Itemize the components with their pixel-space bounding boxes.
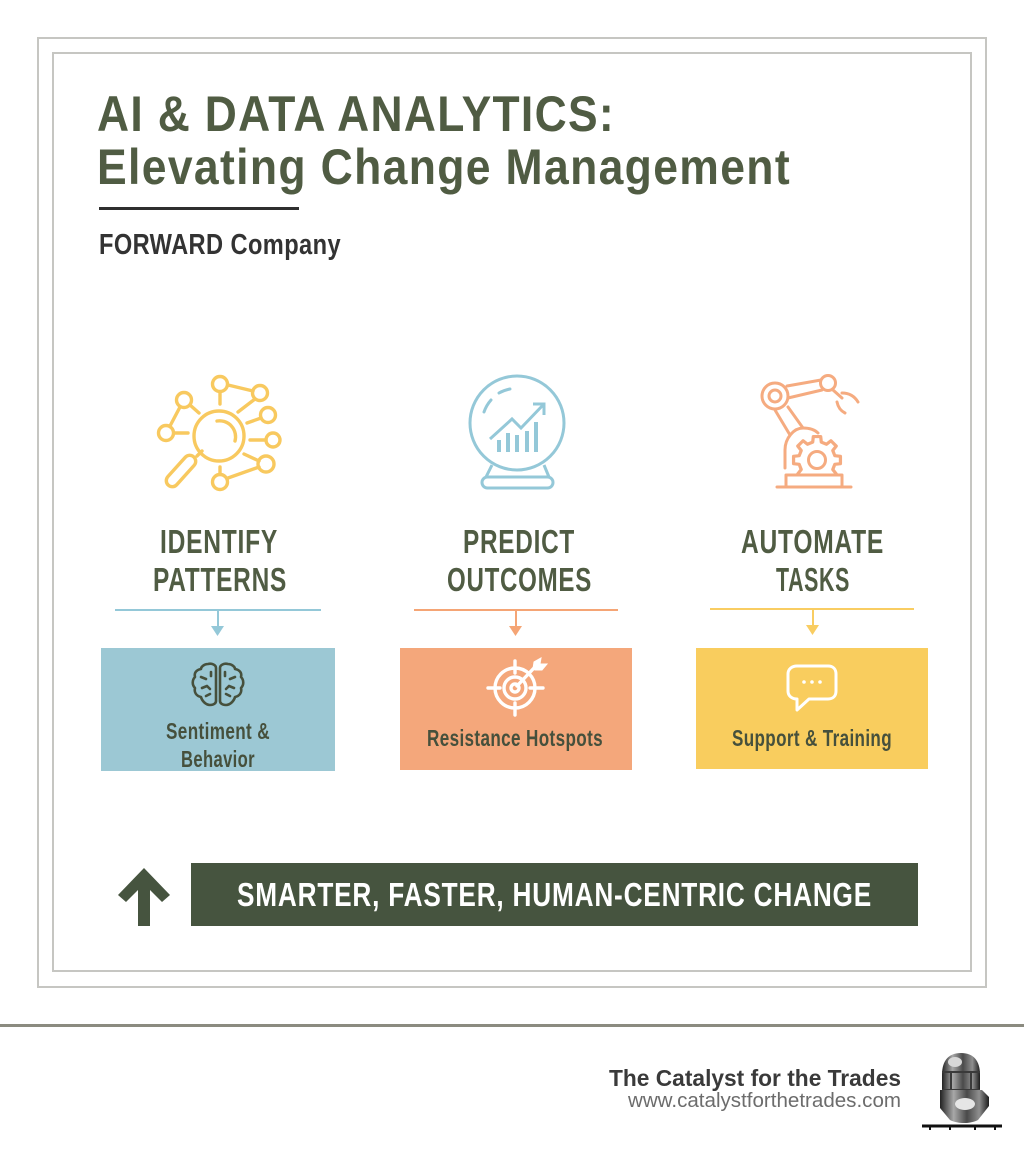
arrow: blue connector xyxy=(115,609,321,636)
column heading: identify patterns xyxy=(153,523,287,598)
column heading: predict outcomes xyxy=(447,523,592,598)
title: Elevating Change Management xyxy=(97,139,791,195)
label: sentiment and behavior: Sentiment & xyxy=(166,718,270,744)
label: resistance hotspots: Resistance Hotspots xyxy=(427,725,603,751)
icon: microphone logo xyxy=(922,1053,1002,1130)
icon: speech bubble xyxy=(788,666,836,710)
title: AI & DATA ANALYTICS: xyxy=(97,86,615,142)
footer text: www.catalystforthetrades.com xyxy=(627,1090,901,1112)
column heading: identify patterns: PATTERNS xyxy=(153,561,287,598)
label: sentiment and behavior xyxy=(166,718,270,772)
panel: resistance hotspots xyxy=(400,648,632,770)
label: sentiment and behavior: Behavior xyxy=(181,746,255,772)
icon: crystal ball xyxy=(470,376,564,488)
footer rule xyxy=(0,1024,1024,1027)
column heading: automate tasks: TASKS xyxy=(776,561,850,598)
column heading: automate tasks: AUTOMATE xyxy=(741,523,884,560)
icon: magnifier network xyxy=(158,376,280,490)
banner: SMARTER, FASTER, HUMAN-CENTRIC CHANGE xyxy=(237,876,872,913)
column heading: predict outcomes: OUTCOMES xyxy=(447,561,592,598)
icon: target with arrow xyxy=(488,658,547,715)
footer text xyxy=(609,1065,901,1112)
subtitle: FORWARD Company xyxy=(99,207,341,261)
icon: up arrow xyxy=(118,868,170,926)
title xyxy=(97,86,791,195)
panel: sentiment and behavior xyxy=(101,648,335,772)
banner xyxy=(191,863,918,926)
column heading: predict outcomes: PREDICT xyxy=(463,523,575,560)
subtitle: FORWARD Company: FORWARD Company xyxy=(99,229,341,261)
column heading: identify patterns: IDENTIFY xyxy=(160,523,278,560)
icon: robot arm xyxy=(762,376,858,487)
panel: support and training xyxy=(696,648,928,769)
arrow: yellow connector xyxy=(710,608,914,635)
icon: brain xyxy=(193,664,243,705)
footer text: The Catalyst for the Trades xyxy=(609,1065,901,1091)
arrow: orange connector xyxy=(414,609,618,636)
label: support and training: Support & Training xyxy=(732,725,892,751)
column heading: automate tasks xyxy=(741,523,884,598)
